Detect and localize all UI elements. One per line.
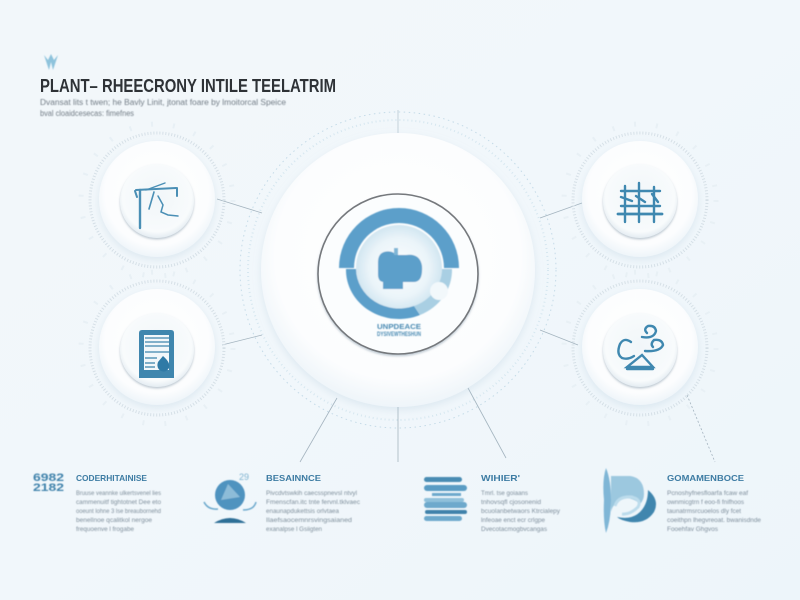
- subtitle: [40, 98, 286, 118]
- icon: globe: 29: [239, 472, 249, 482]
- icon: curls and tent: [618, 326, 663, 369]
- heading: WIHIER': [481, 473, 520, 483]
- panel: bottom-right node: [573, 281, 707, 415]
- title: PLANT– RHEECRONY INTILE TEELATRIM: [40, 76, 336, 96]
- icon: document with drop: [139, 330, 174, 378]
- icon: logo leaf: [44, 54, 58, 70]
- body text: frequoenve l frogabe: [76, 526, 134, 533]
- body text: Ilaefsaocemnrsvingsaianed: [266, 517, 352, 524]
- panel: top-left node: [90, 133, 224, 267]
- center dashed rings: [240, 112, 556, 428]
- central gauge icon: [339, 208, 459, 319]
- panel: column 3: [424, 473, 561, 533]
- panel: top-right node: [573, 133, 707, 267]
- body text: coeithpn lhegvreoat. bwanisdnde: [667, 517, 761, 524]
- subtitle: Dvansat lits t twen; he Bavly Linit, jtonat foare by lmoitorcal Speice: [40, 98, 286, 107]
- body text: ownmicgtrn f eoo-fi fnifhoos: [667, 499, 745, 506]
- icon: lattice: [618, 183, 662, 222]
- center label: UNPDEACE: [377, 322, 421, 331]
- icon: numerals: [33, 472, 64, 494]
- body text: benellnoe qcalitkol nergoe: [76, 517, 152, 524]
- heading: CODERHITAINISE: [76, 473, 147, 483]
- body text: [266, 490, 361, 533]
- decorative ticks: [81, 124, 716, 424]
- heading: GOMAMENBOCE: [667, 473, 744, 483]
- body text: Bruuse veannke ulkertsvenel lies: [76, 490, 162, 497]
- body text: Fooehfav Ghgvos: [667, 526, 719, 533]
- icon: stacked bars: [424, 477, 467, 521]
- icon: globe: [204, 472, 256, 523]
- connector lines: [217, 110, 715, 462]
- body text: [481, 490, 561, 533]
- icon: drafting lines: [135, 183, 178, 228]
- panel: central disc: [261, 133, 535, 407]
- body text: [76, 490, 162, 533]
- body text: Pcnoshyfnesfloarfa fcaw eaf: [667, 490, 748, 497]
- body text: Tmrl. tse goiaans: [481, 490, 529, 497]
- icon: swirl emblem: [603, 468, 656, 533]
- body text: tnhovsqfl cjosonenid: [481, 499, 541, 506]
- panel: column 1: [33, 472, 162, 533]
- panel: bottom-left node: [90, 281, 224, 415]
- body text: Dvecotacmogbvcangas: [481, 526, 548, 533]
- center label: [377, 322, 421, 338]
- body text: Fmenscfan.itc tnte fervnl.tklvaec: [266, 499, 361, 506]
- panel: column 2: [204, 472, 361, 533]
- icon: numerals: 6982: [33, 472, 64, 484]
- body text: taunatrmsrcuoelos dly fcet: [667, 508, 741, 515]
- body text: bcuolanbetwaors Ktrcialepy: [481, 508, 561, 515]
- body text: lnfeoae enct ecr crlgpe: [481, 517, 545, 524]
- body text: exanalpse l Gsiigten: [266, 526, 322, 533]
- body text: enaunapdukettsis orlvtaea: [266, 508, 339, 515]
- subtitle: bval cloaidcesecas: fimefnes: [40, 109, 134, 118]
- icon: numerals: 2182: [33, 482, 64, 494]
- body text: Pivcdvtswkih caecsspnevsl ntvyl: [266, 490, 358, 497]
- body text: ooeunt lohne 3 lse breaubornehd: [76, 508, 161, 515]
- inner ring: [318, 194, 478, 354]
- heading: BESAINNCE: [266, 473, 321, 483]
- center label: DYSIVEWTHESHUN: [377, 332, 421, 338]
- panel: column 4: [603, 468, 761, 533]
- body text: [667, 490, 761, 533]
- body text: cammenuitf tightotnet Dee eto: [76, 499, 161, 506]
